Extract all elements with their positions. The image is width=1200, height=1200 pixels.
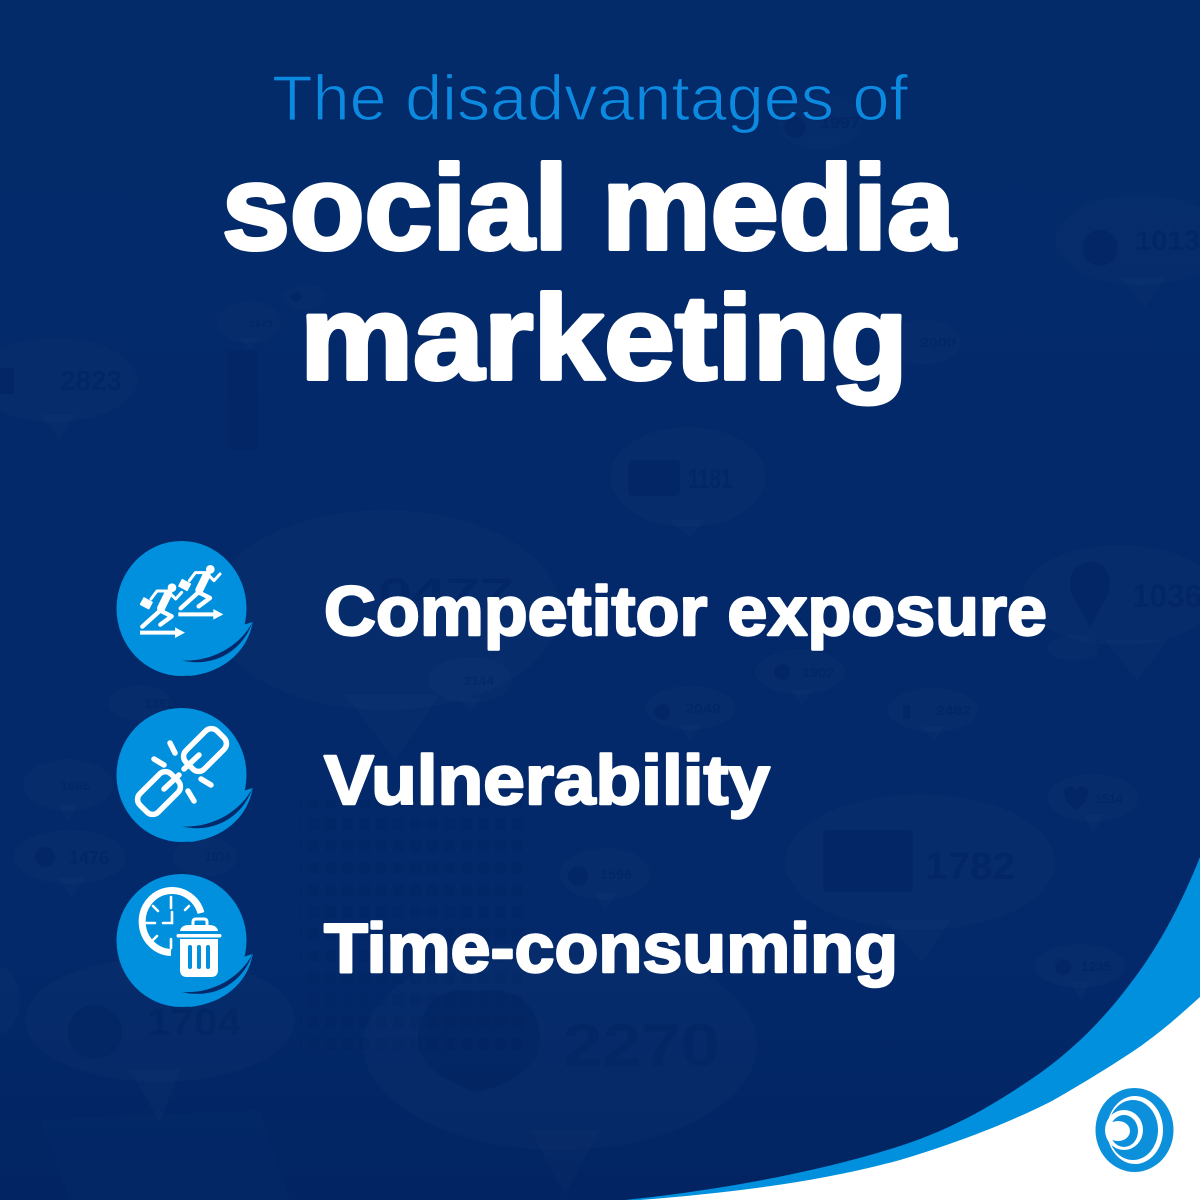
background bubble icons and numbers: 0477 (378, 571, 514, 615)
background bubble icons and numbers: 2000 (920, 335, 956, 350)
background bubble icons and numbers: 2823 (60, 365, 122, 396)
background bubble icons and numbers: 1665 (60, 779, 90, 793)
background bubble icons and numbers: 1782 (925, 846, 1015, 888)
logo: blue spiral (1096, 1088, 1174, 1172)
background bubble icons and numbers: 1997 (820, 115, 860, 132)
title: intro line: The disadvantages of (272, 62, 908, 134)
item 1: competitor exposure (116, 541, 1047, 676)
corner: white area (640, 997, 1200, 1200)
corner band: blue swoosh (625, 857, 1200, 1200)
background bubble icons and numbers: 2673 (249, 319, 273, 329)
background bubble icons and numbers: 2482 (936, 703, 971, 718)
label: vulnerability: Vulnerability (324, 741, 770, 819)
background bubble icons and numbers: 1235 (1081, 959, 1111, 974)
item 3: time-consuming (116, 874, 898, 1007)
background bubble icons and numbers: 1514 (1095, 791, 1124, 806)
title: social media: social media (222, 141, 956, 275)
background bubble icons and numbers: 2144 (464, 674, 494, 688)
label: competitor exposure: Competitor exposure (324, 572, 1047, 650)
background bubble icons and numbers: 1704 (147, 1002, 241, 1044)
title: marketing: marketing (300, 271, 908, 405)
label: time-consuming: Time-consuming (324, 909, 898, 987)
background bubble icons and numbers: 2049 (685, 701, 721, 716)
background bubble icons and numbers: 1902 (802, 665, 834, 680)
item 2: vulnerability (116, 708, 770, 842)
background bubble icons and numbers: 1596 (600, 866, 632, 882)
icon: clock and trash can (116, 874, 253, 1007)
background bubble icons and numbers: 1391 (145, 696, 173, 711)
background bubble icons and numbers: 1036 (205, 850, 231, 864)
background bubble icons and numbers: 1476 (69, 848, 109, 868)
background bubble icons and numbers: 1013 (1135, 225, 1200, 256)
background bubble icons and numbers: 2270 (563, 1012, 720, 1079)
icon: broken chain link (116, 708, 253, 842)
background bubble icons and numbers: 1181 (688, 463, 732, 494)
icon: running competitors (116, 541, 253, 676)
